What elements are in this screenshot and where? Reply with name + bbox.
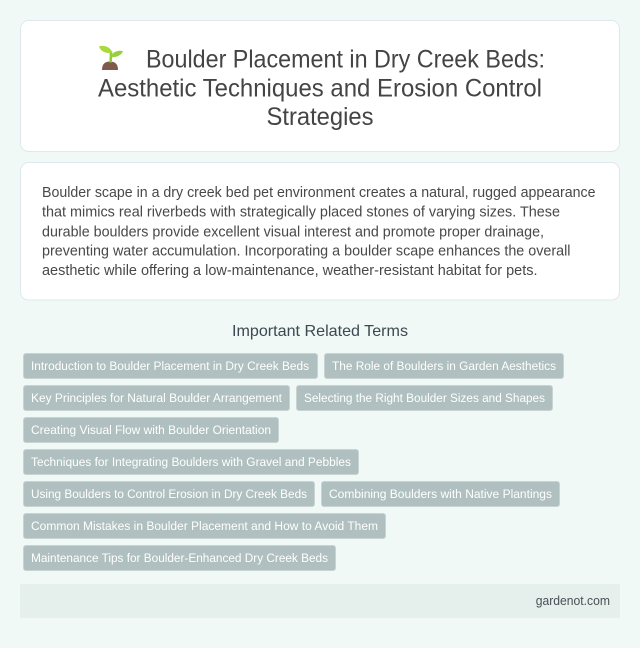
tag: maintenance tips: Maintenance Tips for Boulder-Enhanced Dry Creek Beds — [31, 551, 328, 565]
tag: key principles: Key Principles for Natural Boulder Arrangement — [31, 391, 283, 405]
tag: visual flow — [24, 418, 278, 442]
tag: visual flow: Creating Visual Flow with Boulder Orientation — [31, 423, 271, 437]
tag: role of boulders: The Role of Boulders in Garden Aesthetics — [332, 359, 556, 373]
title: Strategies — [266, 103, 374, 131]
footer: gardenot.com — [536, 593, 610, 608]
text block: description: durable boulders provide excellent visual interest and promote proper drainage, — [42, 224, 544, 240]
panel: related term tags — [24, 354, 564, 570]
text block: description: preventing water accumulation. Incorporating a boulder scape enhances the overall — [42, 244, 570, 260]
tag: maintenance tips — [24, 546, 336, 570]
panel: description — [20, 162, 620, 300]
text block: description: that mimics real riverbeds with strategically placed stones of varying sizes. These — [42, 204, 560, 220]
tag: key principles — [24, 386, 290, 410]
footer — [20, 584, 620, 618]
tag: role of boulders — [324, 354, 564, 378]
panel: title card — [20, 20, 620, 152]
tag: selecting boulders — [296, 386, 552, 410]
tag: erosion control: Using Boulders to Control Erosion in Dry Creek Beds — [31, 487, 307, 501]
icon: seedling — [99, 46, 123, 70]
title: Boulder Placement in Dry Creek Beds: — [146, 46, 545, 74]
text block: description — [42, 185, 596, 279]
tag: integrating techniques: Techniques for Integrating Boulders with Gravel and Pebbles — [31, 455, 351, 469]
title — [98, 46, 545, 131]
tag: integrating techniques — [24, 450, 358, 474]
heading: related terms: Important Related Terms — [232, 323, 408, 340]
tag: common mistakes: Common Mistakes in Boulder Placement and How to Avoid Them — [31, 519, 378, 533]
tag: native plantings — [322, 482, 560, 506]
tag: common mistakes — [24, 514, 386, 538]
tag: introduction — [24, 354, 318, 378]
title: Aesthetic Techniques and Erosion Control — [98, 74, 542, 102]
tag: introduction: Introduction to Boulder Placement in Dry Creek Beds — [31, 359, 309, 373]
text block: description: aesthetic while offering a low-maintenance, weather-resistant habitat for pets. — [42, 263, 538, 279]
tag: erosion control — [24, 482, 314, 506]
tag: native plantings: Combining Boulders with Native Plantings — [329, 487, 552, 501]
text block: description: Boulder scape in a dry creek bed pet environment creates a natural, rugged appearance — [42, 185, 596, 201]
tag: selecting boulders: Selecting the Right Boulder Sizes and Shapes — [304, 391, 545, 405]
